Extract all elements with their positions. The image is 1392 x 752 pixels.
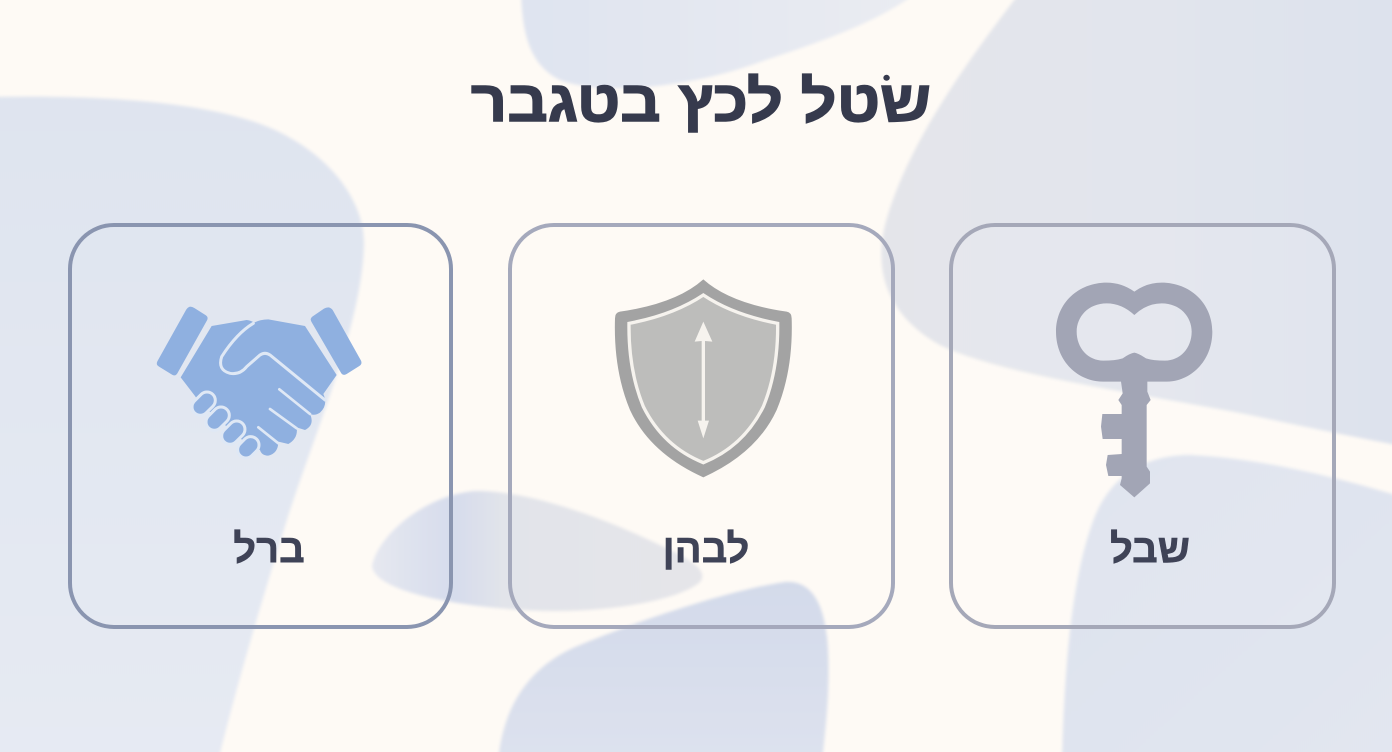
icon: key <box>1056 283 1212 497</box>
icon: handshake <box>157 307 362 461</box>
title: שׂטל לכץ בטגבר <box>471 68 931 133</box>
label: lavan: לבהן <box>663 527 749 571</box>
icon: shield with arrow <box>615 279 792 477</box>
panel: key card <box>951 225 1334 627</box>
panel: shield card <box>510 225 893 627</box>
label: shvil: שבל <box>1110 527 1190 571</box>
label: barel: ברל <box>233 527 305 571</box>
panel: handshake card <box>70 225 451 627</box>
